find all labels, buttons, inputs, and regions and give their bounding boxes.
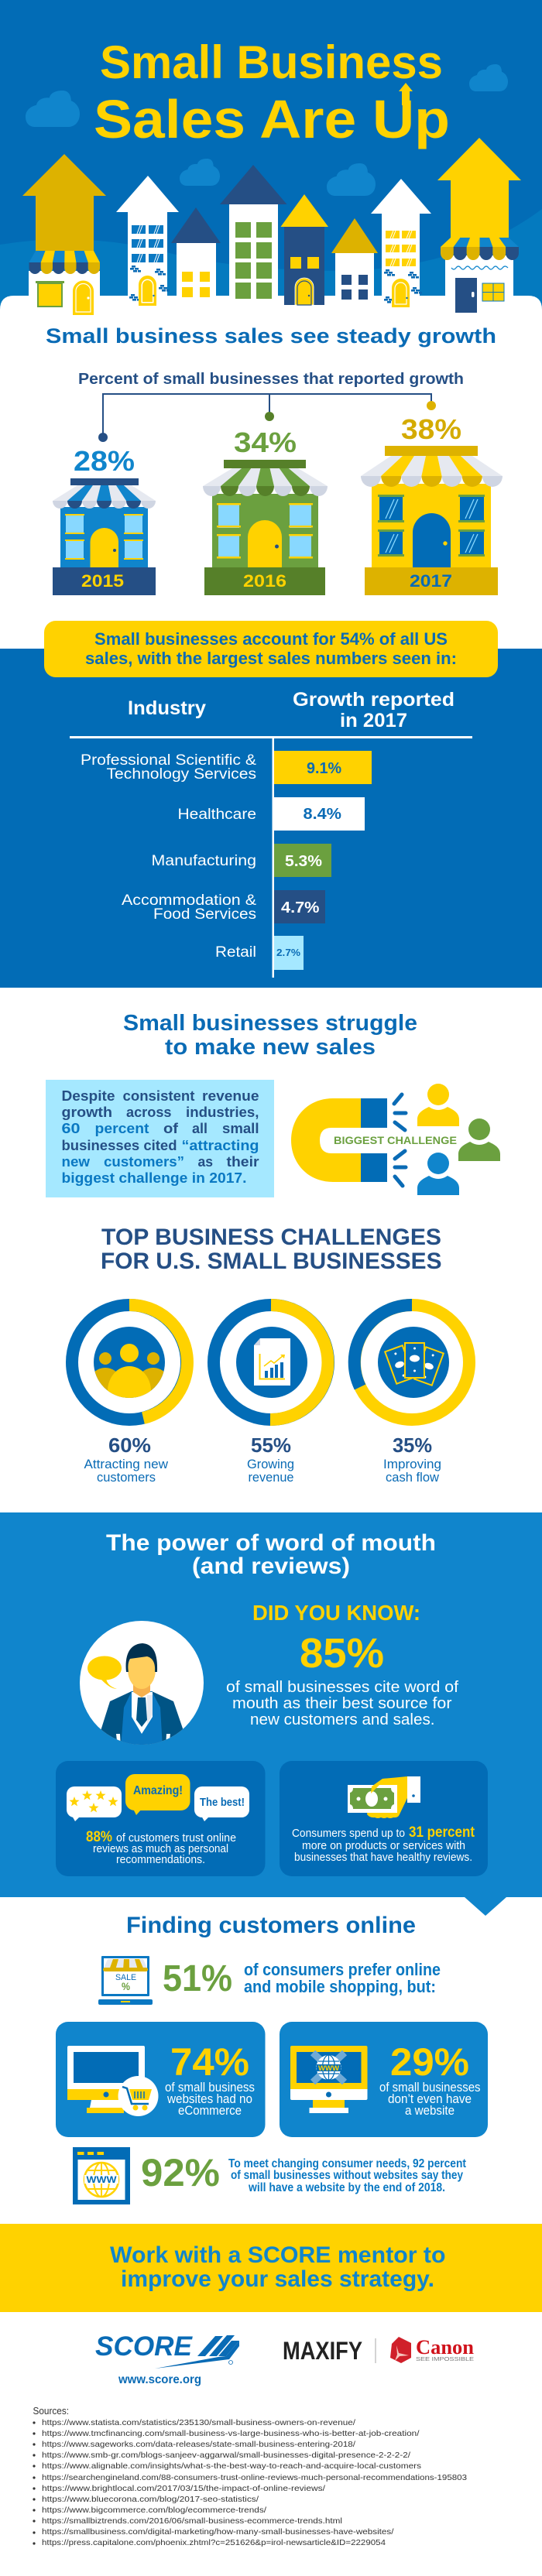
donut chart: growing revenue [214,1305,328,1485]
hills background [0,209,542,402]
callout: 54% of sales: Small businesses account for 54% of all US [94,629,448,649]
card: 74% no ecommerce: 74% [170,2040,249,2084]
text block: despite consistent growth: biggest challenge in 2017. [62,1170,246,1186]
call to action band: Work with a SCORE mentor to [110,2242,446,2268]
icon: monitor with cart [67,2046,158,2116]
stat: did you know 85%: DID YOU KNOW: [252,1601,420,1625]
title: Sales Are Up [94,89,450,149]
text block: despite consistent growth: as [198,1154,213,1170]
sources list: https://www.smb-gr.com/blogs-sanjeev-aggarwal/small-businesses-digital-presence-2-2-2-2/ [42,2451,410,2460]
icon: magnet attracting customers [291,1084,500,1195]
building: navy tower yellow roof [280,194,328,305]
store: 2015: 2015 [81,571,124,591]
card: 74% no ecommerce: of small business [165,2080,255,2095]
title [94,36,450,149]
callout: 54% of sales: sales, with the largest sales numbers seen in: [85,649,457,668]
text block: despite consistent growth: revenue [202,1088,259,1104]
logo: SCORE: SCORE [95,2331,194,2362]
building: navy roof small [171,207,221,297]
donut chart: attracting new customers: 60% [108,1434,151,1457]
bar chart: growth by industry: 2.7% [276,947,300,958]
heading: struggle to make new sales: Small businesses struggle [123,1011,417,1036]
heading: finding customers online: Finding customers online [126,1913,416,1938]
table headers: Growth reported [293,689,455,711]
table headers: in 2017 [340,710,407,731]
industry labels: Retail [215,944,256,961]
store: 2017 [361,413,503,595]
store: 2015: 28% [74,445,135,477]
donut chart: improving cash flow: cash flow [386,1470,440,1485]
text block: despite consistent growth: new [62,1154,91,1170]
industry labels: Food Services [153,906,256,923]
card: 74% no ecommerce: websites had no [166,2091,252,2106]
sources list: https://press.capitalone.com/phoenix.zhtml?c=251626&p=irol-newsarticle&ID=2229054 [42,2538,386,2547]
text block: despite consistent growth: across [126,1105,172,1120]
title: Small Business [100,36,443,88]
sources list: https://www.bluecorona.com/blog/2017-seo-statistics/ [42,2495,259,2504]
card: 29% no website: of small businesses [379,2080,480,2095]
card: customers trust reviews: recommendations. [116,1853,205,1866]
text block: despite consistent growth: Despite [62,1088,115,1104]
card: customers trust reviews [56,1761,265,1876]
panel: word of mouth section [0,1512,542,1916]
bar chart: growth by industry: 8.4% [304,806,341,823]
stat: did you know 85% [226,1601,458,1728]
card: 29% no website: 29% [390,2040,469,2084]
card: customers trust reviews: 88% [86,1829,112,1845]
card: consumers spend more [280,1761,488,1876]
stat: 51% prefer online [163,1958,441,1999]
stat: 92% will have a website: To meet changing consumer needs, 92 percent [228,2157,466,2170]
icon: review speech bubbles: Amazing! [133,1784,183,1797]
industry labels: Healthcare [178,807,256,823]
store: 2017: 38% [401,413,461,445]
industry labels: Manufacturing [152,853,256,869]
store: 2015 [53,445,156,595]
card: 29% no website [280,2022,488,2137]
building: white arrow tower right [371,179,431,307]
call to action band: improve your sales strategy. [121,2266,434,2292]
icon: magnet attracting customers: BIGGEST CHALLENGE [334,1134,457,1146]
text block: despite consistent growth: 60 [62,1121,81,1136]
panel: industry growth section [0,621,542,988]
icon: clouds [26,64,508,196]
bar chart: growth by industry: 5.3% [285,853,322,870]
stat: did you know 85%: mouth as their best source for [232,1695,452,1712]
text block: despite consistent growth: consistent [122,1088,195,1104]
icon: browser window with globe: WWW [87,2174,117,2185]
callout: 54% of sales [44,621,498,677]
stat: 51% prefer online: and mobile shopping, but: [244,1977,436,1996]
donut chart: improving cash flow [355,1305,469,1485]
stat: 92% will have a website: of small businesses without websites say they [231,2169,463,2182]
text block: despite consistent growth: their [226,1154,259,1170]
icon: review speech bubbles [67,1774,249,1821]
icon: laptop storefront sale [98,1956,153,2005]
store: 2016: 34% [234,426,297,458]
text block: despite consistent growth: small [222,1121,259,1136]
logo: Maxify: MAXIFY [283,2337,362,2365]
text block: despite consistent growth: percent [94,1121,149,1136]
building: gold roof small [331,218,378,301]
table headers [128,689,455,731]
industry labels: Accommodation & [122,892,256,909]
heading: steady growth: Small business sales see steady growth [46,324,496,348]
card: 29% no website: a website [405,2103,455,2118]
donut chart: growing revenue: revenue [248,1470,294,1485]
heading: struggle to make new sales [123,1011,417,1060]
card: 29% no website: don’t even have [388,2091,472,2106]
stat: 92% will have a website: 92% [141,2151,220,2194]
stat: 51% prefer online: of consumers prefer online [244,1960,441,1979]
icon: browser window with globe [73,2147,130,2204]
sources list: https://www.tmcfinancing.com/small-business-vs-large-business-who-is-better-at-job-creation/ [42,2429,420,2438]
heading: struggle to make new sales: to make new sales [165,1035,376,1060]
sources list: https://www.alignable.com/insights/what-s-the-best-way-to-reach-and-acquire-local-customers [42,2461,421,2471]
icon: laptop storefront sale: % [122,1980,130,1992]
text block: despite consistent growth: of [163,1121,179,1136]
table headers: Industry [128,697,206,719]
stat: did you know 85%: of small businesses cite word of [226,1679,458,1696]
donut chart: improving cash flow: 35% [393,1434,432,1457]
stat: 92% will have a website: will have a website by the end of 2018. [248,2181,445,2194]
bar chart: growth by industry: 4.7% [281,899,320,916]
card: consumers spend more: more on products or services with [302,1839,465,1852]
sources list: https://www.sageworks.com/data-releases/state-small-business-entering-2018/ [42,2440,355,2449]
industry labels: Professional Scientific & [81,752,256,769]
industry labels: Technology Services [107,766,256,783]
building: right shop with arrow [437,138,521,313]
store: 2016: 2016 [243,571,286,591]
stat: did you know 85%: 85% [300,1630,384,1677]
donut chart: improving cash flow: Improving [383,1457,441,1471]
donut chart: attracting new customers [72,1305,187,1485]
logo: SCORE [95,2331,239,2386]
donut chart: growing revenue: 55% [251,1434,291,1457]
building: white arrow tower left [116,176,179,306]
heading: word of mouth [106,1530,436,1579]
logo: Canon: SEE IMPOSSIBLE [416,2355,474,2362]
donut chart: growing revenue: Growing [247,1457,294,1471]
subheading: percent reported growth: Percent of small businesses that reported growth [78,371,464,388]
sources list: https://smallbiztrends.com/2016/06/small-business-ecommerce-trends.html [42,2516,342,2526]
card: consumers spend more: businesses that have healthy reviews. [294,1851,472,1864]
text block: despite consistent growth: all [192,1121,208,1136]
logo: SCORE: www.score.org [118,2373,201,2386]
card: 74% no ecommerce [56,2022,265,2137]
sources list: https://smallbusiness.com/digital-marketing/how-many-small-businesses-have-websites/ [42,2527,394,2537]
card: customers trust reviews: of customers trust online [116,1831,236,1845]
icon: businessman with speech bubble [80,1621,204,1748]
logo: Canon: Canon [416,2336,475,2358]
building: tall green windows [220,165,286,300]
bar chart: growth by industry: 9.1% [307,760,341,777]
sources list [33,2405,467,2547]
sources list: https://www.bigcommerce.com/blog/ecommerce-trends/ [42,2506,266,2515]
text block: despite consistent growth: industries, [186,1105,259,1120]
sources list: Sources: [33,2405,69,2417]
stat: 92% will have a website [141,2151,466,2194]
industry labels [81,752,256,961]
card: consumers spend more: Consumers spend up to [292,1827,405,1840]
text block: despite consistent growth: “attracting [181,1138,259,1153]
connector lines [98,394,436,442]
heading: word of mouth: The power of word of mouth [106,1530,436,1556]
text block: despite consistent growth: businesses cited [62,1138,177,1153]
heading: top business challenges: TOP BUSINESS CHALLENGES [101,1225,441,1250]
card: customers trust reviews: reviews as much as personal [93,1842,228,1855]
call to action band [0,2224,542,2312]
icon: hand with money [348,1776,420,1818]
ground [0,296,542,402]
icon: laptop storefront sale: SALE [115,1973,136,1982]
store: 2017: 2017 [410,571,452,591]
heading: top business challenges [101,1225,441,1274]
donut chart: attracting new customers: Attracting new [84,1457,169,1471]
icon: monitor with crossed out globe: WWW [318,2064,340,2072]
card: 74% no ecommerce: eCommerce [178,2103,242,2118]
icon: review speech bubbles: The best! [200,1797,245,1809]
heading: word of mouth: (and reviews) [192,1553,350,1579]
store: 2016 [203,426,328,595]
sources list: https://searchengineland.com/88-consumers-trust-online-reviews-much-personal-recommendations-195803 [42,2473,467,2482]
donut chart: attracting new customers: customers [97,1470,156,1485]
text block: despite consistent growth: customers” [104,1154,184,1170]
heading: top business challenges: FOR U.S. SMALL BUSINESSES [101,1249,441,1274]
stat: did you know 85%: new customers and sales. [250,1711,435,1728]
card: consumers spend more: 31 percent [409,1824,475,1841]
sources list: https://www.brightlocal.com/2017/03/15/the-impact-of-online-reviews/ [42,2484,325,2493]
icon: monitor with crossed out globe [290,2046,367,2113]
stat: 51% prefer online: 51% [163,1958,232,1999]
table axes [70,736,472,978]
building: left shop with arrow [22,154,106,315]
bar chart: growth by industry [274,751,372,970]
sources list: https://www.statista.com/statistics/235130/small-business-owners-on-revenue/ [42,2418,355,2427]
text block: despite consistent growth: growth [62,1105,112,1120]
logo: Canon [375,2336,475,2363]
text block: despite consistent growth [46,1080,274,1197]
panel: hero header [0,0,542,402]
